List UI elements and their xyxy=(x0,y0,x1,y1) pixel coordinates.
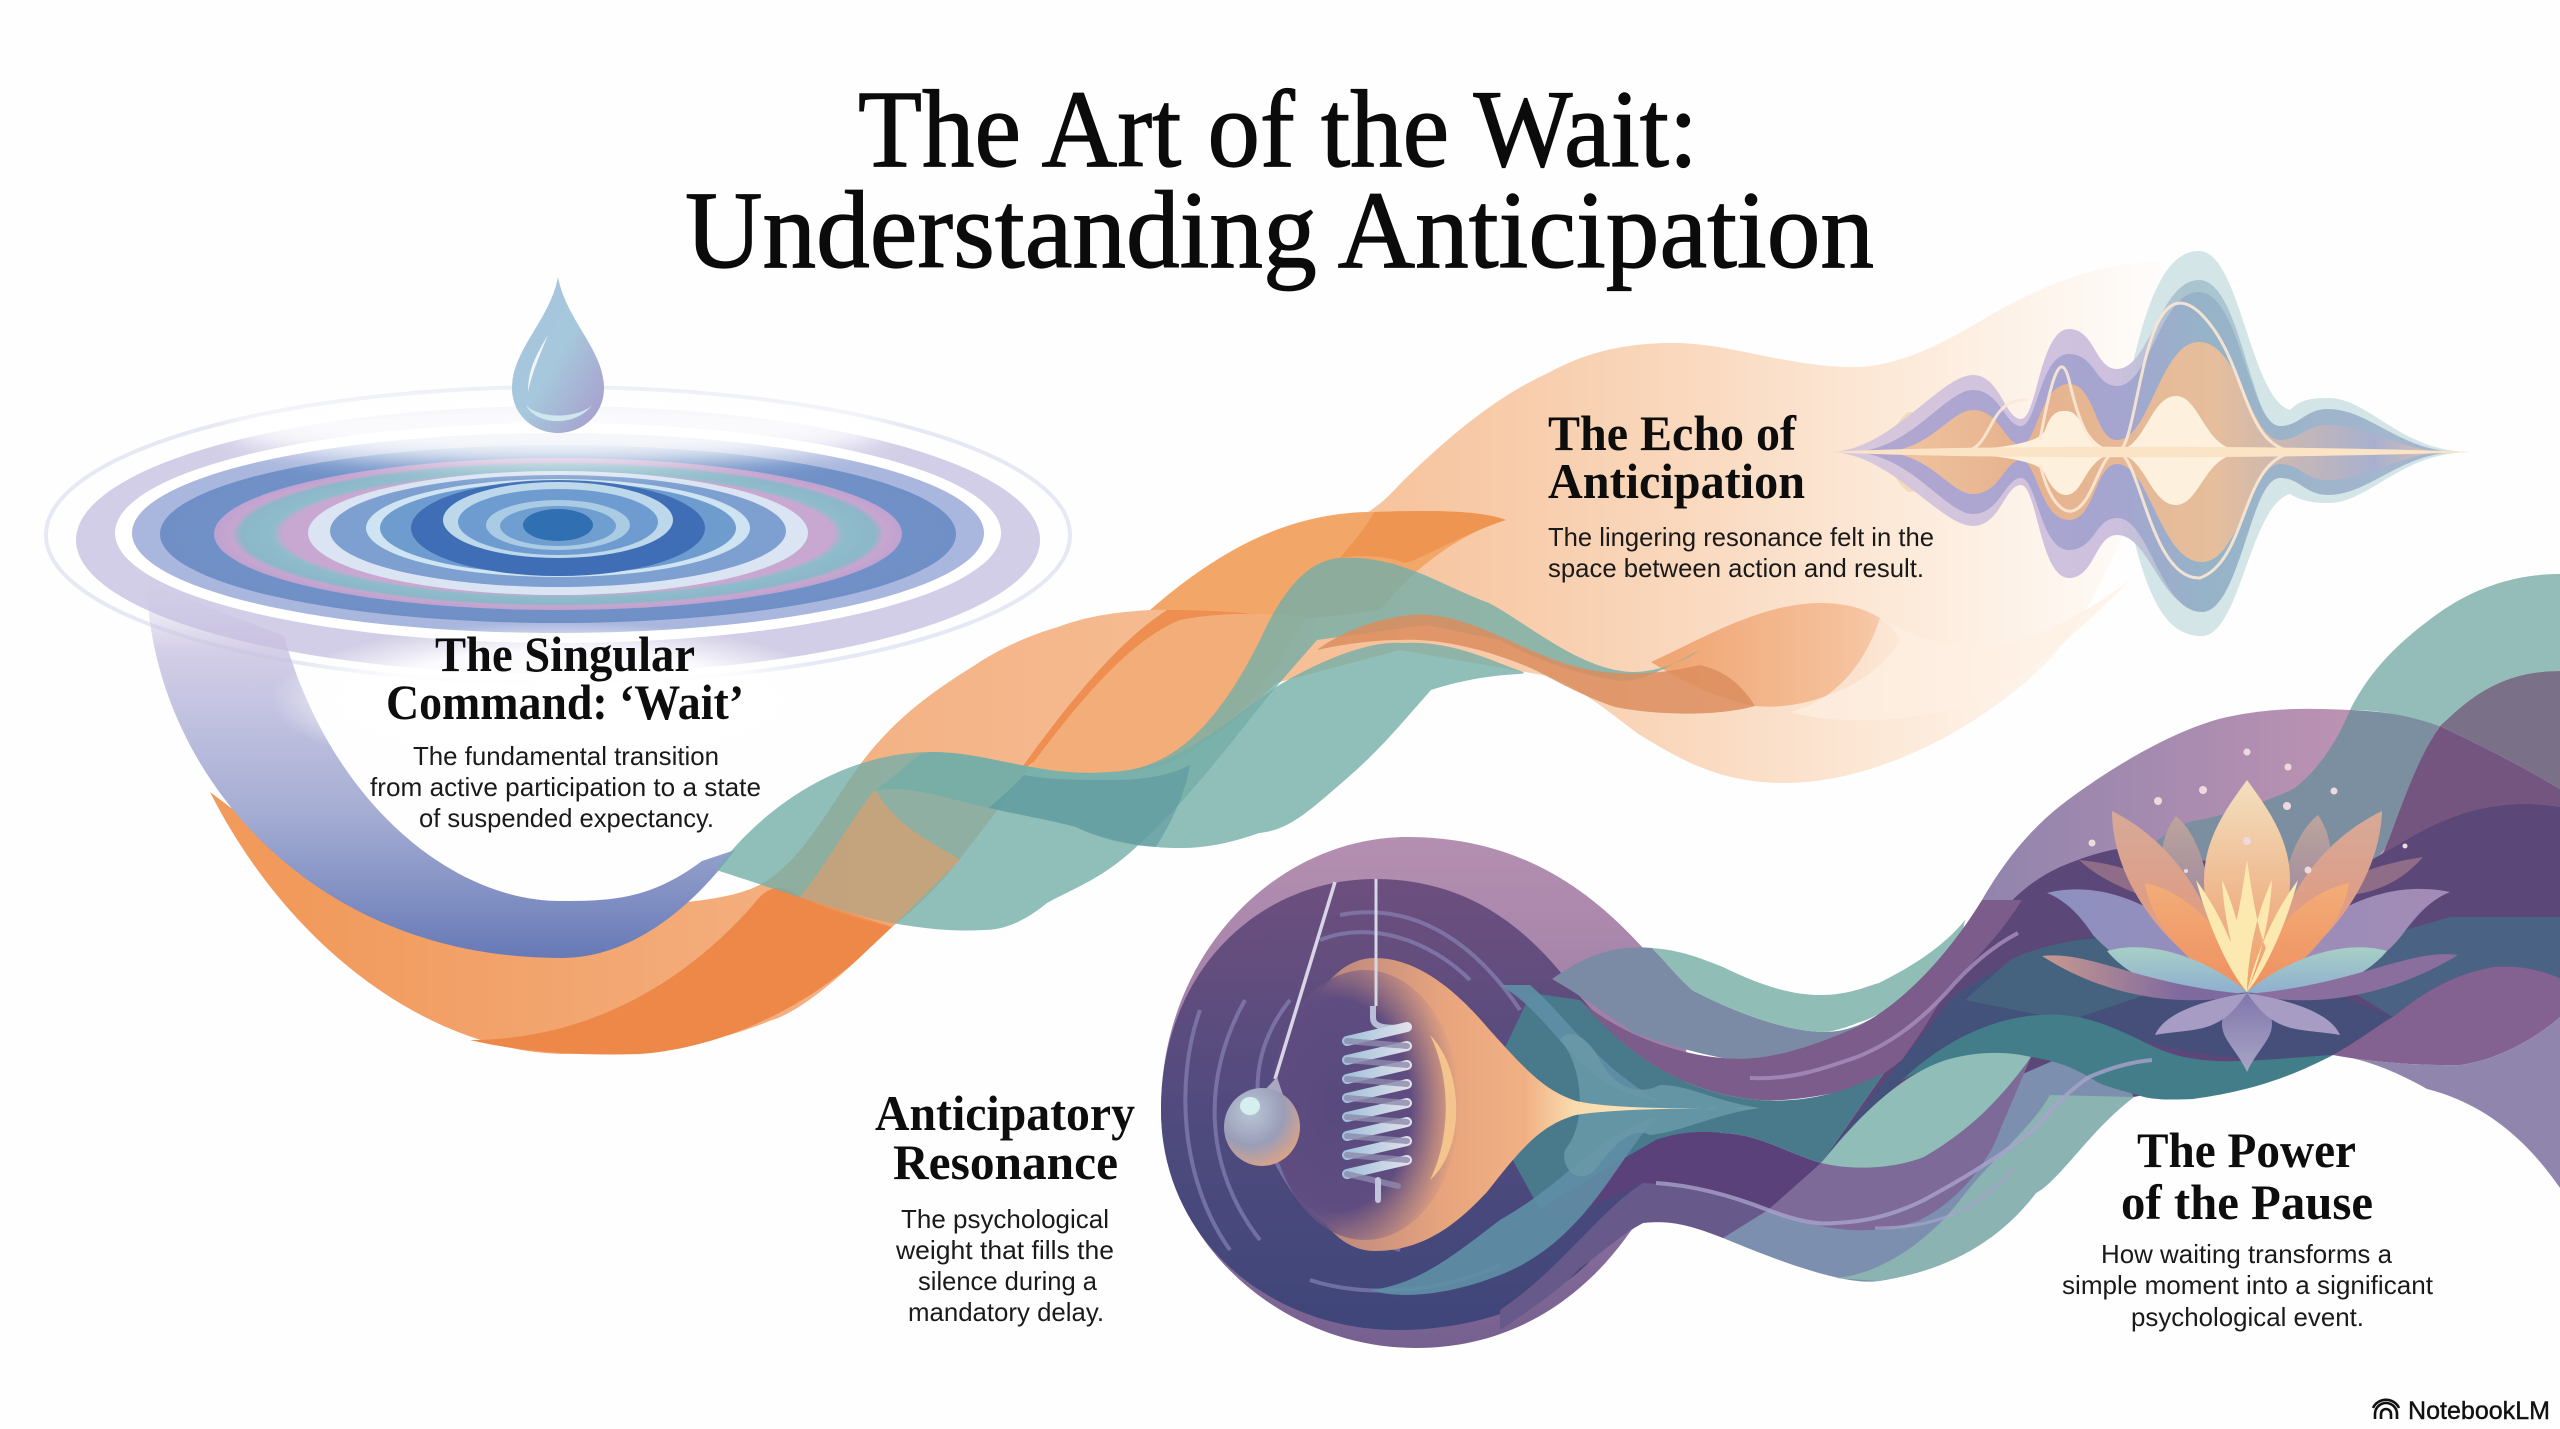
text: anticipatory resonance: Anticipatory xyxy=(875,1085,1135,1141)
waveform layer: cream core xyxy=(1900,396,2400,505)
ribbon: navy wedge xyxy=(1821,935,2250,1163)
ripple: blue basin xyxy=(160,445,956,623)
ribbon: dark teal overlap xyxy=(989,765,1190,847)
ripple: centre bead xyxy=(523,509,593,541)
funnel: orange resonance xyxy=(1290,958,1800,1251)
ripple: pale ring xyxy=(308,471,808,595)
ribbon: right purple lobe xyxy=(2333,967,2560,1065)
ribbon: teal over mauve xyxy=(2120,710,2440,900)
ribbon: dark teal right xyxy=(2300,917,2560,1017)
ribbon: mauve top band xyxy=(1982,709,2560,1055)
ribbon: amber middle strand xyxy=(1317,615,1755,714)
ribbon: large orange wave xyxy=(210,262,2170,1054)
ribbon: plum band xyxy=(1580,900,2022,1100)
ripple: lavender ring xyxy=(76,406,1040,674)
funnel: inner crescent xyxy=(1430,1035,1456,1180)
lotus: side leaves xyxy=(2047,889,2450,993)
funnel: dark core xyxy=(1270,970,1460,1240)
ripple pool xyxy=(46,387,1070,683)
lotus: sparkles xyxy=(2088,748,2408,874)
ribbon: lilac plum band xyxy=(1768,1057,2031,1230)
text: the power of the pause xyxy=(2062,1122,2434,1332)
ribbon: light teal lens xyxy=(1821,1053,2031,1168)
text: the singular command: from active participation to a state xyxy=(370,772,761,802)
lotus: low teal leaves xyxy=(2107,947,2387,995)
text: the echo of anticipation: Anticipation xyxy=(1548,453,1805,509)
text: the power of the pause: of the Pause xyxy=(2121,1174,2373,1230)
ripple: white inner ring xyxy=(366,479,750,577)
ribbon: teal top right xyxy=(2350,574,2560,726)
text: the echo of anticipation: The Echo of xyxy=(1548,405,1797,461)
ribbon: teal lower wave xyxy=(875,643,1524,848)
lotus: centre petal xyxy=(2204,780,2290,992)
text: the echo of anticipation: space between action and result. xyxy=(1548,553,1924,583)
lotus: flame centre xyxy=(2196,860,2298,992)
lotus: thin right leaf xyxy=(2247,954,2458,1000)
waveform layer: small left bump xyxy=(1870,412,1945,492)
waveform layer: teal outer xyxy=(2117,251,2472,636)
ripple: dark crescent xyxy=(411,480,705,576)
text: the power of the pause: The Power xyxy=(2137,1122,2356,1178)
text: anticipatory resonance: Resonance xyxy=(893,1134,1118,1190)
lotus: orange back petals xyxy=(2112,811,2382,981)
ripple: top glow xyxy=(228,392,888,464)
ribbon: teal upper wave xyxy=(716,558,1700,931)
ribbon: teal lower right xyxy=(1835,1095,2134,1281)
ribbon: upper orange hump xyxy=(1150,511,1506,620)
ribbon: dark purple band xyxy=(1821,804,2560,1163)
lotus: inner orange petals xyxy=(2145,883,2349,992)
ring arcs xyxy=(1185,912,1520,1291)
text: anticipatory resonance xyxy=(875,1085,1135,1327)
lotus: mauve back petals xyxy=(2162,815,2331,960)
logo: NotebookLM: NotebookLM xyxy=(2408,1397,2550,1425)
lotus: side under petals xyxy=(2155,993,2340,1035)
text: the echo of anticipation xyxy=(1548,405,1934,583)
waveform layer: warm core xyxy=(1880,342,2450,562)
ripple: pale inner ring xyxy=(443,482,673,558)
ribbon: orange lobe xyxy=(1651,603,1900,707)
ribbon: dark teal behind lotus xyxy=(1965,939,2240,1020)
text: the singular command: Command: ‘Wait’ xyxy=(386,674,744,730)
teal ribbons xyxy=(716,558,1755,931)
wisp: second lower line xyxy=(1875,1170,2013,1228)
text: the singular command: The Singular xyxy=(435,626,695,682)
ribbon: deep teal channel xyxy=(1480,993,1884,1210)
lobe: mauve bottom xyxy=(1500,1150,1723,1268)
ribbon: slate band xyxy=(1552,947,1900,1060)
icon: lotus xyxy=(2042,748,2458,1072)
circle scene: anticipatory resonance xyxy=(1161,837,1723,1348)
title xyxy=(685,68,1874,291)
ripple: white glow behind heading xyxy=(270,622,850,778)
ripple: inner blue xyxy=(500,506,616,546)
lotus: thin leaves xyxy=(2042,955,2247,1000)
ribbon: lower silhouette base xyxy=(1723,1040,2134,1282)
ribbon: teal under lotus xyxy=(1902,1015,2333,1100)
wave blobs xyxy=(1560,1034,1760,1176)
lotus: back dark petals xyxy=(2079,857,2423,920)
ripple: pink and teal ring xyxy=(214,458,902,610)
waveform layer: lavender outer xyxy=(1829,280,2440,610)
ripple: blue ring xyxy=(330,475,786,587)
icon: pendulum xyxy=(1224,882,1335,1166)
ribbon: navy under lotus xyxy=(2080,960,2393,1060)
circle: dark inner disc xyxy=(1161,879,1720,1330)
icon: water drop xyxy=(512,277,604,433)
ribbon: lower right lilac xyxy=(2333,1017,2560,1188)
text: anticipatory resonance: mandatory delay. xyxy=(908,1297,1104,1327)
text: the power of the pause: psychological event. xyxy=(2131,1302,2364,1332)
icon: spring xyxy=(1347,879,1407,1200)
ribbon: teal band xyxy=(1652,920,1965,1032)
ripple: outer thin rings xyxy=(46,387,1070,683)
wisp: upper light line xyxy=(1750,933,2018,1078)
orange ribbons xyxy=(210,262,2170,1054)
ribbons crossing the centre xyxy=(1480,900,2560,1330)
text: anticipatory resonance: The psychological xyxy=(901,1204,1109,1234)
text: anticipatory resonance: weight that fills the xyxy=(895,1235,1114,1265)
text: the singular command: of suspended expectancy. xyxy=(419,803,714,833)
ripple: periwinkle ring xyxy=(132,433,984,633)
ribbon: orange over teal xyxy=(800,790,960,927)
ripple: dark core xyxy=(380,482,736,574)
ribbon: purple sweep xyxy=(1500,1183,1768,1330)
text: the echo of anticipation: The lingering resonance felt in the xyxy=(1548,522,1934,552)
waveform layer: blue violet xyxy=(1850,292,2460,612)
ribbon: dark plum band xyxy=(1540,1132,1821,1217)
text: the singular command: The fundamental transition xyxy=(413,741,719,771)
ribbon: plum right xyxy=(2380,726,2560,860)
wisps around funnel xyxy=(1370,985,1660,1295)
ribbon: dark orange lower strand xyxy=(470,888,892,1054)
text: the power of the pause: How waiting transforms a xyxy=(2101,1239,2393,1269)
waveform axis xyxy=(1829,447,2472,457)
waveform: the echo xyxy=(1829,251,2472,636)
text: the power of the pause: simple moment into a significant xyxy=(2062,1270,2434,1300)
lotus: under petals xyxy=(2222,993,2272,1072)
ribbon: orange inner lobe xyxy=(1030,614,1305,773)
ribbon: grey mauve corner xyxy=(2440,671,2560,789)
text: anticipatory resonance: silence during a xyxy=(918,1266,1098,1296)
circle: outer mauve disc xyxy=(1161,837,1687,1348)
ripple: inner band xyxy=(486,500,630,550)
ribbon: blue bowl xyxy=(147,583,735,958)
title: The Art of the Wait: xyxy=(858,68,1698,190)
wisp: lower light line xyxy=(1656,1060,2152,1224)
resonance rings and funnel xyxy=(1185,879,1800,1295)
ribbon: cream strand xyxy=(1790,580,2130,720)
ribbon: dark orange diagonal strand xyxy=(1018,596,1300,773)
lower ribbons behind the circle xyxy=(1821,574,2560,1163)
title: Understanding Anticipation xyxy=(685,169,1874,291)
ribbon: darker orange crossing xyxy=(1340,511,1506,563)
ripple: white ring xyxy=(115,423,1001,643)
ripple: lighter centre xyxy=(458,489,658,555)
waveform thin lines xyxy=(1960,303,2300,578)
text: the singular command xyxy=(370,626,761,833)
